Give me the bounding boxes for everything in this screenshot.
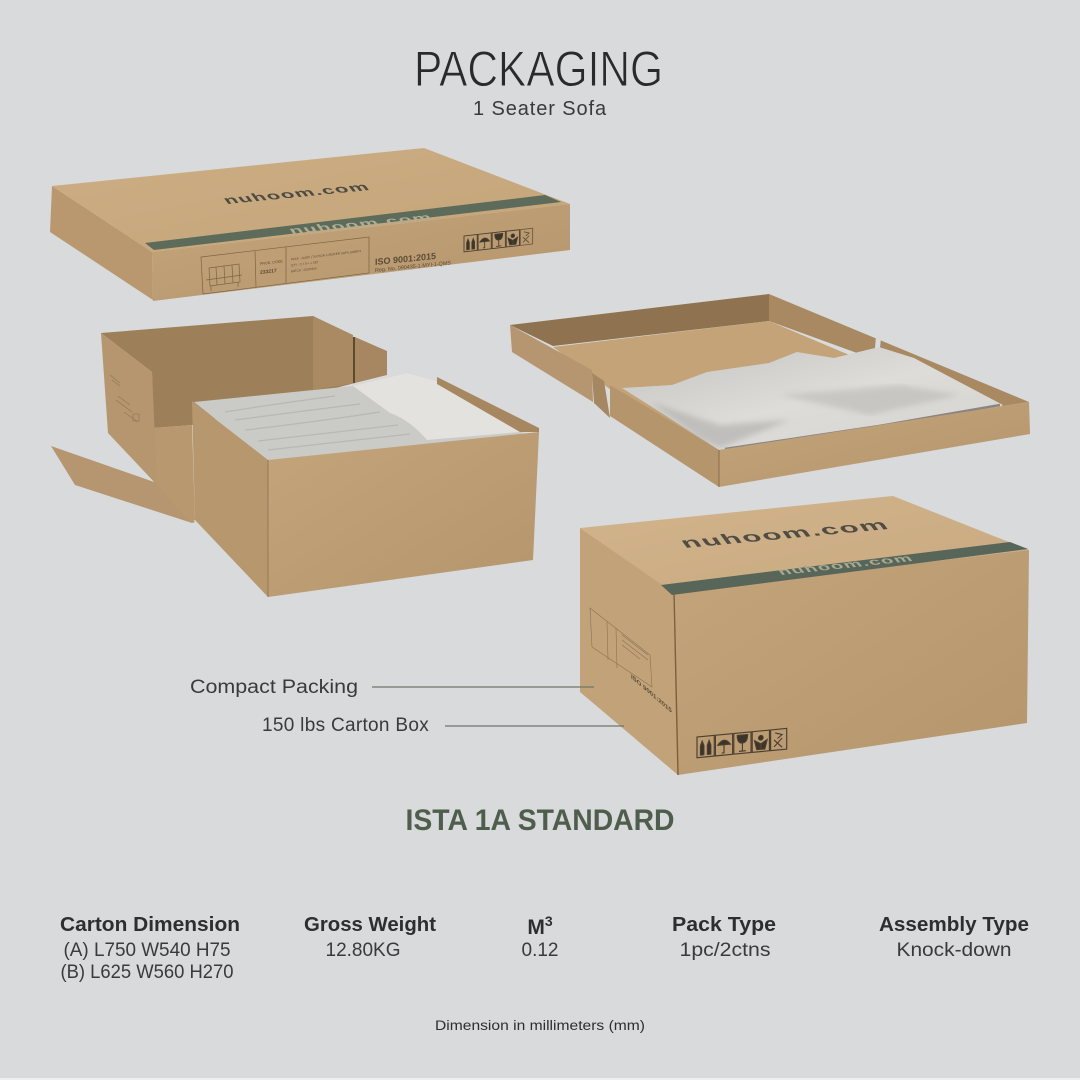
spec: cubic metres: 3	[545, 913, 553, 929]
front right wall	[719, 402, 1030, 487]
flat closed carton (A)	[50, 148, 570, 301]
spec: carton dimension	[60, 914, 240, 983]
small print on open panel	[110, 375, 139, 422]
logo on top: nuhoom.com	[220, 180, 373, 206]
spec: gross weight: Gross Weight	[304, 914, 436, 936]
corner seam	[353, 337, 355, 383]
product label text: PACK : JA260 | TUCSON 3 SEATER SOFA 1068974	[291, 249, 361, 261]
bottom edge	[0, 1078, 1080, 1080]
white wrap	[353, 373, 520, 440]
open carton with folded sofa parts	[51, 316, 539, 597]
inner back wall	[101, 316, 355, 428]
open tray carton with wrapped panel	[510, 294, 1030, 487]
footnote: Dimension in millimeters (mm)	[435, 1018, 645, 1033]
plastic shadow band 2	[780, 385, 960, 415]
spec: gross weight	[304, 914, 436, 961]
floor	[153, 425, 195, 522]
wrapped cushion	[194, 373, 525, 461]
wall tear	[875, 336, 881, 348]
lower shadow edge	[725, 405, 1000, 449]
side ISO mark: ISO 9001:2015	[631, 674, 672, 715]
rear right flap	[355, 337, 387, 383]
spec: pack type	[672, 914, 776, 961]
top face	[580, 496, 1029, 592]
ISO mark: Reg. No. 090435-1-MYI-1-QMS	[375, 260, 451, 274]
tray corner fold	[592, 373, 610, 418]
spec: gross weight: 12.80KG	[326, 940, 400, 961]
left face	[580, 528, 678, 775]
opened left panel	[101, 333, 157, 485]
front edge	[267, 460, 269, 597]
top face	[52, 148, 570, 252]
spec: carton dimension: (A) L750 W540 H75	[64, 940, 230, 961]
logo on top: nuhoom.com	[676, 517, 894, 551]
product label text: PROD. CODE	[260, 259, 283, 266]
product label panel	[201, 237, 369, 294]
plastic shadow band	[650, 402, 790, 448]
spec: assembly type	[879, 914, 1029, 961]
callout: carton box: 150 lbs Carton Box	[262, 715, 429, 736]
tray right wall	[769, 294, 1029, 406]
wrapped panel	[622, 347, 1003, 450]
spec: assembly type: Knock-down	[896, 940, 1012, 961]
ISO mark: ISO 9001:2015	[375, 251, 436, 267]
spec: pack type: 1pc/2ctns	[680, 940, 770, 961]
sofa parts in plastic	[194, 373, 525, 461]
front corner edge	[718, 450, 720, 487]
standard heading: ISTA 1A STANDARD	[406, 804, 674, 837]
inner right wall	[313, 316, 355, 390]
box left face	[192, 401, 268, 597]
handling icons	[697, 728, 787, 758]
product label text: 233217	[260, 268, 277, 276]
back right flap	[437, 377, 539, 432]
spec: cubic metres: M	[527, 916, 545, 939]
front face	[152, 204, 570, 301]
ISO mark	[375, 249, 451, 274]
cushion texture	[225, 396, 410, 450]
spec: carton dimension: Carton Dimension	[60, 914, 240, 936]
spec: pack type: Pack Type	[672, 914, 776, 936]
front left wall	[610, 385, 719, 487]
box front face	[268, 432, 539, 597]
logo on stripe: nuhoom.com	[775, 553, 916, 577]
product label text: QTY : C × 8 × 1 SET	[291, 260, 319, 267]
front face	[673, 550, 1029, 775]
spec: cubic metres: 0.12	[522, 940, 558, 961]
tray floor	[553, 321, 1003, 470]
left face	[50, 186, 153, 300]
spec: assembly type: Assembly Type	[879, 914, 1029, 936]
green stripe	[661, 542, 1028, 595]
spec: cubic metres	[522, 913, 558, 961]
callout: compact packing: Compact Packing	[190, 677, 358, 698]
title: PACKAGING	[414, 41, 663, 97]
product label text: BATCH : 20160916	[291, 266, 317, 273]
seam	[674, 592, 678, 775]
tray back wall	[510, 294, 769, 346]
side label	[590, 608, 652, 687]
handling icons	[464, 228, 533, 252]
green stripe	[145, 195, 561, 250]
tray left wall	[510, 325, 593, 402]
large closed carton (B)	[580, 496, 1029, 775]
product label text	[260, 249, 361, 277]
bottom flap	[51, 446, 195, 523]
spec: carton dimension: (B) L625 W560 H270	[60, 962, 234, 983]
logo on stripe: nuhoom.com	[286, 211, 436, 236]
subtitle: 1 Seater Sofa	[473, 98, 607, 120]
